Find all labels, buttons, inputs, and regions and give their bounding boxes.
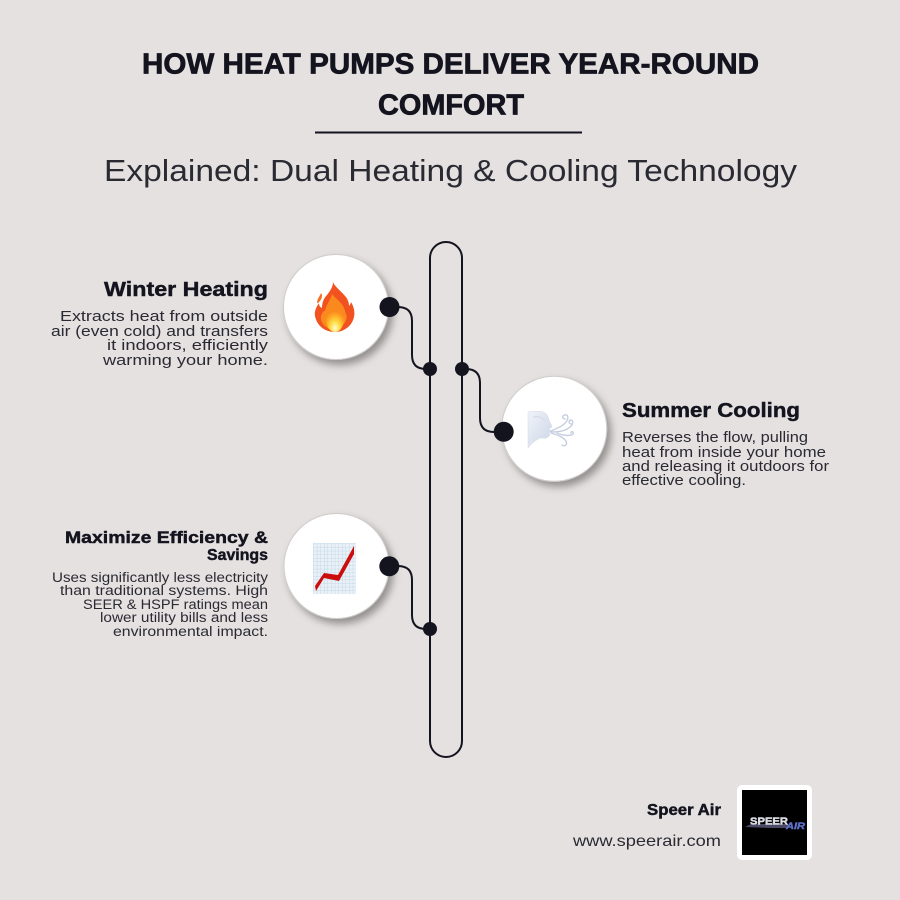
text block: maximize efficiency and savings: Uses significantly less electricity <box>52 570 268 585</box>
heading: summer cooling: Summer Cooling <box>622 399 800 422</box>
heading: maximize efficiency and savings: Savings <box>207 547 268 564</box>
text block: summer cooling <box>622 430 829 489</box>
text block: maximize efficiency and savings: lower utility bills and less <box>100 610 268 625</box>
website: www.speerair.com <box>572 833 721 850</box>
circle: summer cooling <box>502 376 607 481</box>
text block: winter heating: air (even cold) and transfers <box>51 324 268 340</box>
icon: blowing wind face <box>528 411 573 448</box>
logo: SPEER <box>750 816 789 828</box>
circle: maximize efficiency and savings <box>284 514 389 618</box>
panel: maximize efficiency and savings <box>52 514 437 639</box>
node: maximize efficiency <box>379 556 399 576</box>
text block: maximize efficiency and savings <box>52 570 268 639</box>
track node: summer cooling <box>455 362 469 376</box>
text block: winter heating: it indoors, efficiently <box>107 338 269 354</box>
text block: summer cooling: heat from inside your home <box>622 445 826 461</box>
title <box>142 48 759 122</box>
connector: maximize efficiency <box>389 566 430 629</box>
text block: winter heating: warming your home. <box>102 353 268 369</box>
text block: winter heating <box>51 309 269 369</box>
track node: winter heating <box>423 362 437 376</box>
title: HOW HEAT PUMPS DELIVER YEAR-ROUND <box>142 48 759 80</box>
node: summer cooling <box>494 422 514 442</box>
connector: summer cooling <box>462 369 503 432</box>
node: winter heating <box>380 297 400 317</box>
brand name: Speer Air <box>647 802 721 819</box>
title: COMFORT <box>378 90 524 122</box>
text block: summer cooling: Reverses the flow, pulling <box>622 430 808 446</box>
logo <box>737 785 812 860</box>
subtitle: Explained: Dual Heating & Cooling Technology <box>104 153 798 188</box>
track node: maximize efficiency <box>423 622 437 636</box>
heading: winter heating: Winter Heating <box>104 278 268 301</box>
central pill track <box>430 242 462 757</box>
circle: winter heating <box>284 254 388 360</box>
panel: summer cooling <box>455 362 829 489</box>
heading: maximize efficiency and savings: Maximize Efficiency & <box>65 528 268 547</box>
text block: summer cooling: and releasing it outdoors for <box>622 459 829 475</box>
icon: rising chart <box>313 543 356 594</box>
icon: flame <box>315 282 354 332</box>
text block: maximize efficiency and savings: SEER & HSPF ratings mean <box>83 597 268 612</box>
text block: maximize efficiency and savings: than traditional systems. High <box>60 583 268 598</box>
connector: winter heating <box>389 307 430 369</box>
text block: winter heating: Extracts heat from outside <box>60 309 268 325</box>
text block: maximize efficiency and savings: environmental impact. <box>113 624 268 639</box>
panel: winter heating <box>51 254 437 376</box>
logo: AIR <box>785 821 806 831</box>
text block: summer cooling: effective cooling. <box>622 473 746 489</box>
footer: brand <box>572 785 812 860</box>
heading: maximize efficiency and savings <box>65 528 268 564</box>
